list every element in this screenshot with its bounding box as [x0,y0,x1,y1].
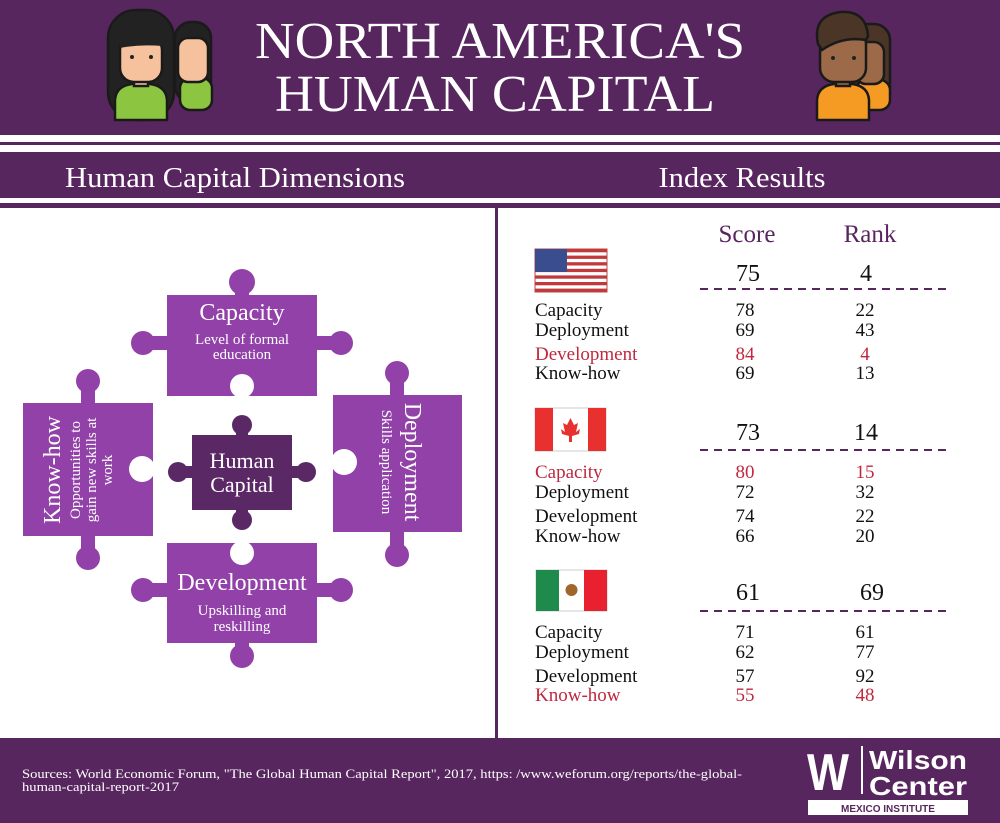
table column headers [719,221,897,248]
Canada block: Deployment [535,482,630,503]
Mexico block: 57 [736,666,754,687]
Mexico block: 55 [736,685,754,706]
title: NORTH AMERICA'S [255,13,745,70]
Canada block: Development [535,506,638,527]
piece: Know-how: gain new skills at [84,417,100,522]
piece: Capacity [131,269,353,398]
Mexico block: 62 [736,642,754,663]
piece: Know-how: Know-how [40,415,66,524]
Canada block: 14 [854,420,878,446]
Canada block [535,408,948,547]
icon: people left [108,10,212,120]
Canada block: 72 [736,482,754,503]
sources text: human-capital-report-2017 [22,779,180,794]
Mexico block: 92 [856,666,874,687]
Canada block: Know-how [535,526,621,547]
Canada block: Capacity [535,462,603,483]
title [255,13,745,123]
Mexico block: Development [535,666,638,687]
logo: Wilson Center Mexico Institute: Center [869,771,967,801]
logo: Wilson Center Mexico Institute [807,744,968,815]
logo: Wilson Center Mexico Institute: MEXICO INSTITUTE [841,804,935,815]
logo: Wilson Center Mexico Institute: W [807,744,850,802]
piece: Development: Upskilling and [198,603,287,619]
Mexico block: 77 [856,642,874,663]
piece: Development: reskilling [214,619,271,635]
USA block: 4 [860,261,872,287]
table column headers: Rank [844,221,897,248]
Mexico block: 71 [736,622,754,643]
USA block: 69 [736,320,754,341]
Canada block: 32 [856,482,874,503]
piece: Deployment: Skills application [378,410,394,515]
Mexico block: 61 [856,622,874,643]
USA block: Know-how [535,363,621,384]
piece: Know-how [23,369,155,570]
USA block [535,249,948,384]
puzzle diagram [23,269,462,668]
table column headers: Score [719,221,775,248]
flag: Canada [535,408,606,451]
Canada block: 66 [736,526,754,547]
heading: Index Results: Index Results [658,163,826,194]
Canada block: 22 [856,506,874,527]
Canada block: 80 [736,462,754,483]
header band [0,0,1000,145]
piece: Know-how: Opportunities to [68,421,84,519]
USA block: 13 [856,363,874,384]
vertical divider [495,208,498,738]
Mexico block: Know-how [535,685,621,706]
piece: Deployment: Deployment [399,403,425,522]
USA block: 84 [736,344,755,365]
section header band [0,152,1000,208]
Canada block: 15 [856,462,874,483]
Canada block: 20 [856,526,874,547]
flag: USA [535,249,607,292]
piece: Human Capital center: Human [210,448,274,473]
USA block: 78 [736,300,754,321]
piece: Deployment [331,361,462,567]
heading: Human Capital Dimensions: Human Capital Dimensions [65,163,405,194]
icon: people right [817,12,890,120]
USA block: Development [535,344,638,365]
piece: Know-how: work [100,454,116,485]
Mexico block: Capacity [535,622,603,643]
piece: Human Capital center: Capital [210,472,274,497]
piece: Development: Development [177,570,307,596]
USA block: Deployment [535,320,630,341]
USA block: 75 [736,261,760,287]
Canada block: 73 [736,420,760,446]
Mexico block: 61 [736,580,760,606]
USA block: 4 [860,344,870,365]
flag: Mexico [536,570,607,611]
footer band [0,738,1000,823]
USA block: 43 [856,320,874,341]
logo: Wilson Center Mexico Institute: Wilson [869,745,967,775]
piece: Capacity: education [213,347,272,363]
sources text [22,766,742,794]
piece: Capacity: Level of formal [195,332,289,348]
piece: Human Capital center [168,415,316,530]
USA block: 22 [856,300,874,321]
Mexico block: 48 [856,685,874,706]
piece: Development [131,541,353,668]
sources text: Sources: World Economic Forum, "The Global Human Capital Report", 2017, https: /www.weforum.org/reports/the-global- [22,766,742,781]
USA block: 69 [736,363,754,384]
title: HUMAN CAPITAL [275,66,715,123]
Mexico block: 69 [860,580,884,606]
Canada block: 74 [736,506,755,527]
piece: Capacity: Capacity [199,300,285,326]
Mexico block [535,570,948,706]
Mexico block: Deployment [535,642,630,663]
USA block: Capacity [535,300,603,321]
